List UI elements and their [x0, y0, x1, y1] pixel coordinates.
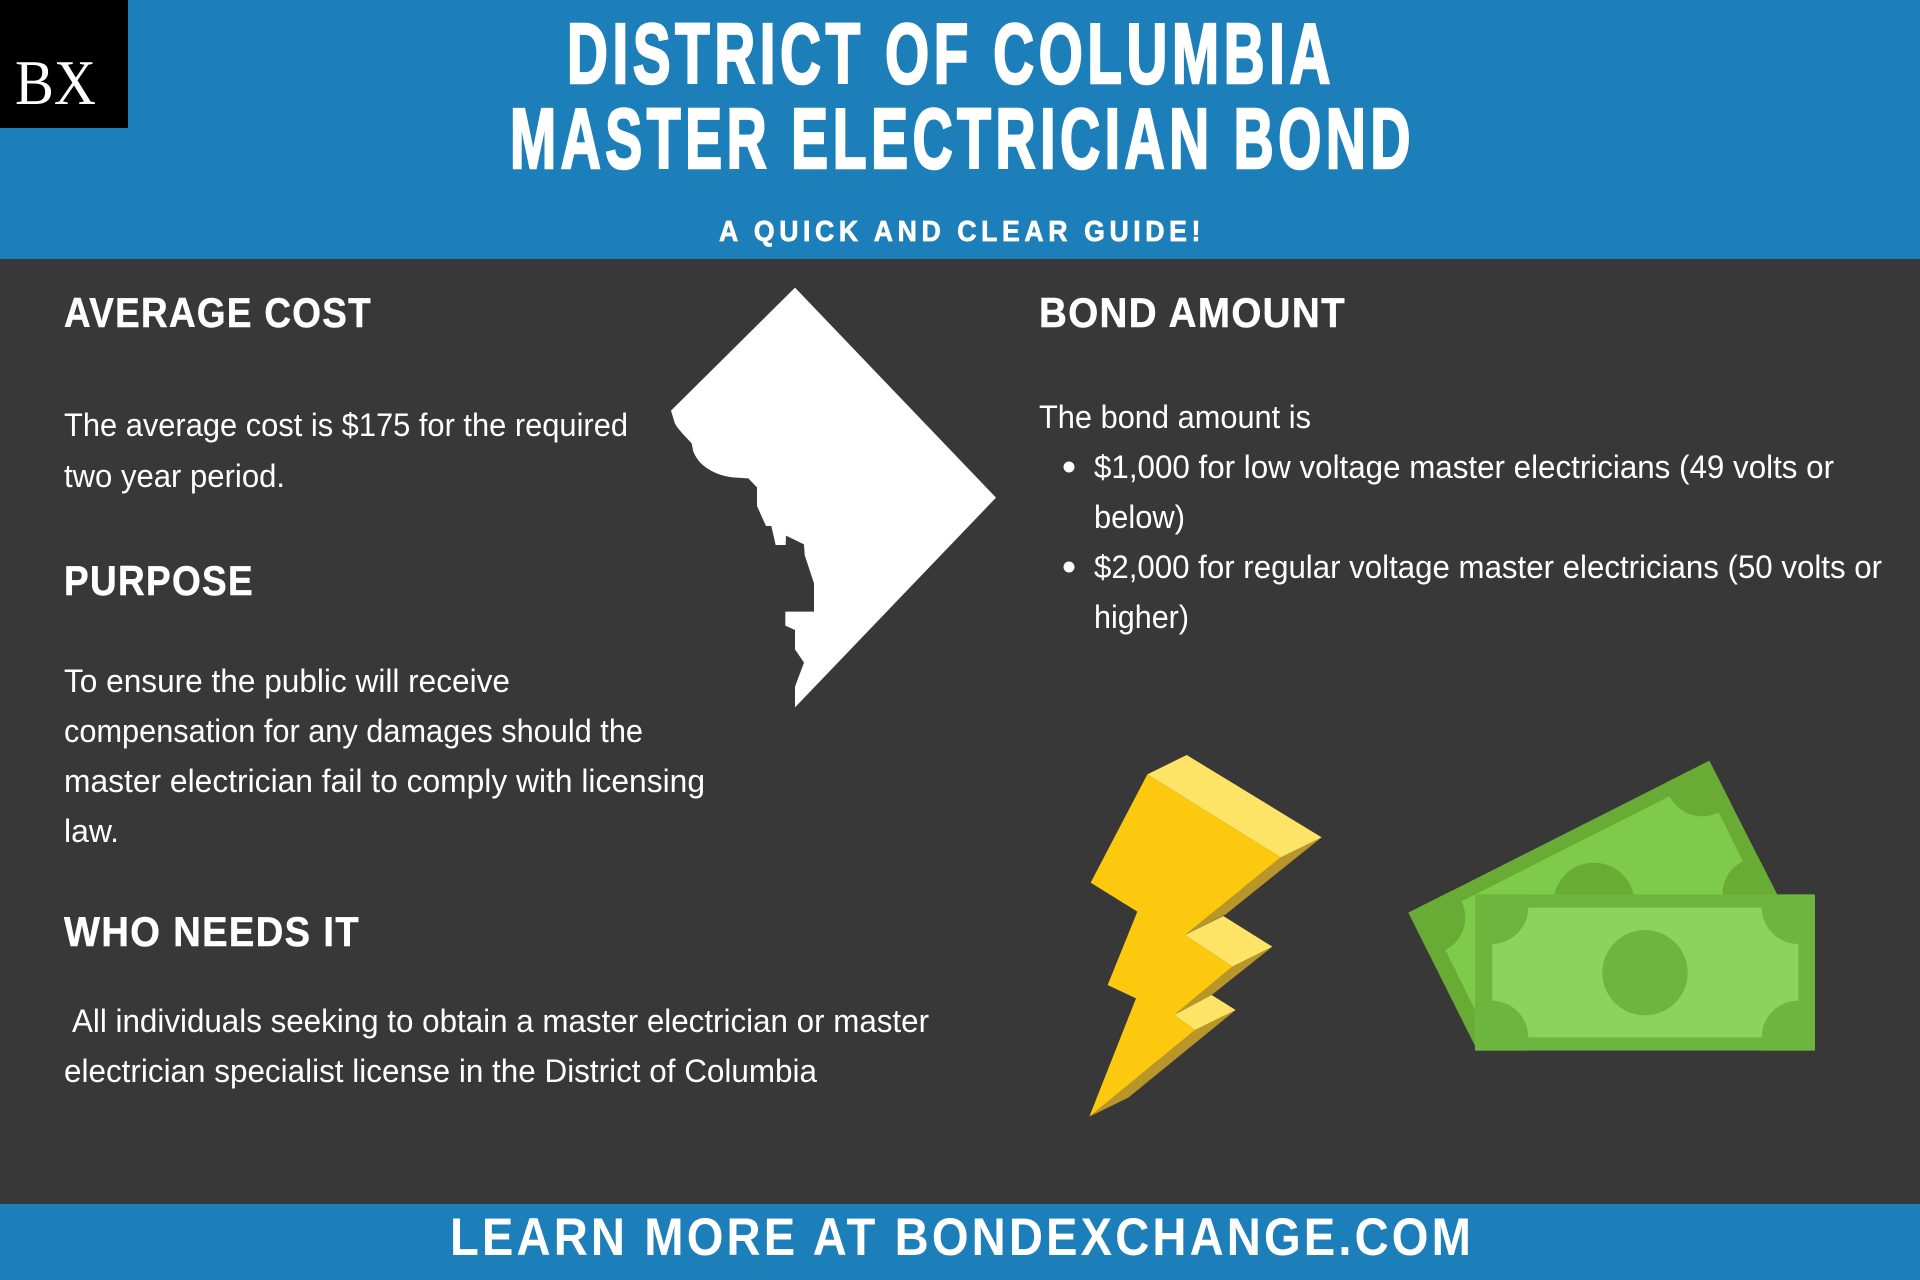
heading: purpose: PURPOSE: [64, 557, 254, 604]
title: DISTRICT OF COLUMBIA: [567, 7, 1335, 102]
footer text: LEARN MORE AT BONDEXCHANGE.COM: [450, 1208, 1474, 1267]
text: average cost body: two year period.: [64, 458, 285, 494]
text: purpose body: compensation for any damages should the: [64, 713, 643, 749]
heading: who needs it: WHO NEEDS IT: [64, 908, 360, 955]
list item: low voltage: $1,000 for low voltage master electricians (49 volts or: [1094, 449, 1834, 485]
header band: [0, 0, 1920, 259]
text: purpose body: master electrician fail to comply with licensing: [64, 763, 705, 799]
panel: bond amount: [1039, 289, 1882, 635]
list item: low voltage: [1064, 449, 1834, 535]
list item: low voltage: below): [1094, 499, 1185, 535]
list item: regular voltage: $2,000 for regular voltage master electricians (50 volts or: [1094, 549, 1882, 585]
back bill: [1408, 760, 1778, 1046]
text: purpose body: To ensure the public will receive: [64, 663, 510, 699]
text: average cost body: [64, 407, 628, 494]
text: who needs it body: [64, 1003, 929, 1089]
panel: average cost: [64, 289, 628, 494]
front bill: [1475, 894, 1815, 1051]
title: [510, 7, 1415, 187]
list item: regular voltage: [1064, 549, 1882, 635]
text: who needs it body: All individuals seeking to obtain a master electrician or master: [72, 1003, 929, 1039]
footer band: [0, 1204, 1920, 1280]
logo: BX: BX: [15, 47, 96, 118]
panel: purpose: [64, 557, 705, 849]
text: who needs it body: electrician specialist license in the District of Columbia: [64, 1053, 817, 1089]
icon: lightning bolt: [1089, 755, 1322, 1117]
logo: BX: [0, 0, 128, 128]
text: purpose body: [64, 663, 705, 849]
heading: bond amount: BOND AMOUNT: [1039, 289, 1346, 336]
panel: who needs it: [64, 908, 929, 1089]
icon: money bills: [1408, 760, 1815, 1051]
heading: average cost: AVERAGE COST: [64, 289, 372, 336]
subtitle: A QUICK AND CLEAR GUIDE!: [719, 216, 1205, 248]
title: MASTER ELECTRICIAN BOND: [510, 92, 1415, 187]
icon: map of District of Columbia: [671, 288, 996, 707]
list item: regular voltage: higher): [1094, 599, 1189, 635]
text: average cost body: The average cost is $175 for the required: [64, 407, 628, 443]
text: purpose body: law.: [64, 813, 119, 849]
text: bond amount intro: The bond amount is: [1039, 399, 1311, 435]
